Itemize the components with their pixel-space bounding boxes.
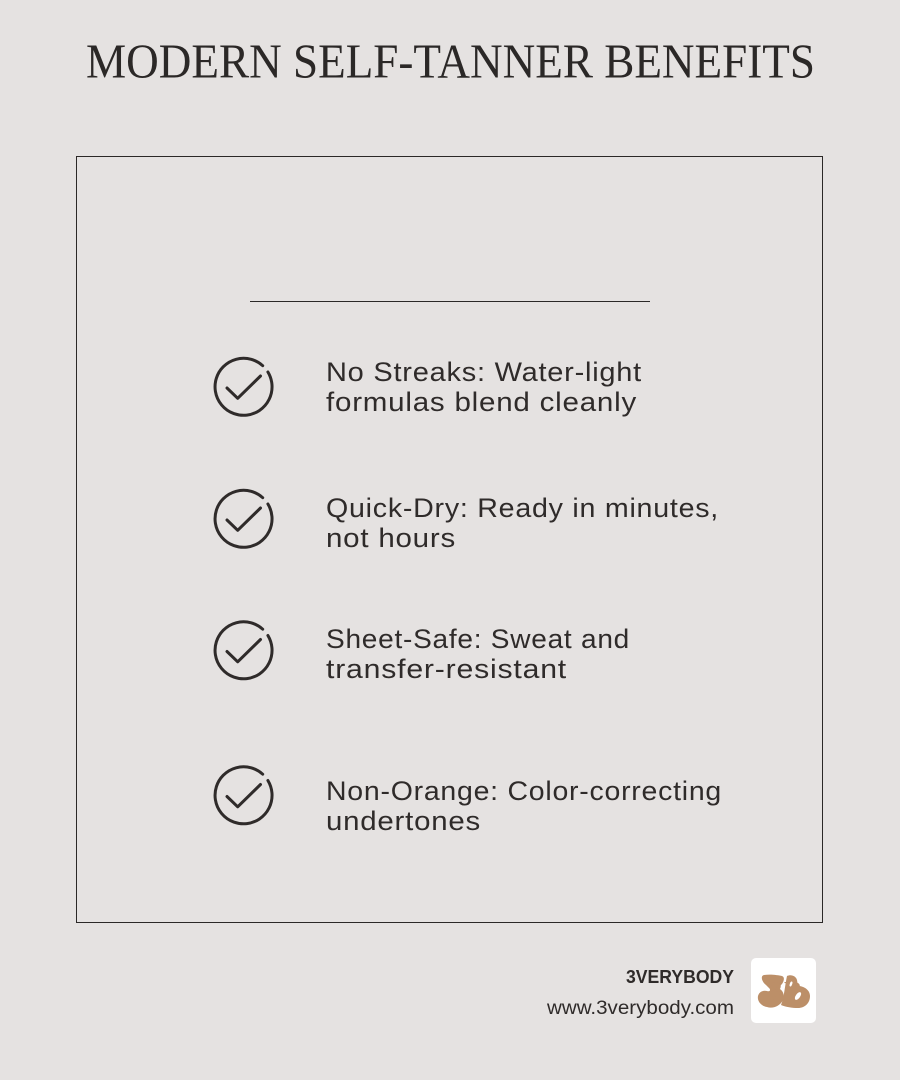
footer url: www.3verybody.com	[546, 997, 734, 1019]
text: sheet-safe: Sheet-Safe: Sweat and	[326, 624, 630, 654]
icon: check circle	[215, 358, 272, 415]
footer brand name: 3VERYBODY	[626, 967, 734, 987]
benefit: non-orange	[215, 767, 722, 836]
text: non-orange: undertones	[326, 806, 481, 836]
icon: check circle	[215, 767, 272, 824]
icon: check circle	[215, 622, 272, 679]
benefit: no streaks	[215, 357, 642, 417]
text: no streaks: No Streaks: Water-light	[326, 357, 642, 387]
title: MODERN SELF-TANNER BENEFITS	[86, 34, 815, 88]
panel: benefits	[76, 156, 822, 922]
text: non-orange: Non-Orange: Color-correcting	[326, 776, 722, 806]
text: quick-dry: not hours	[326, 523, 456, 553]
benefit: sheet-safe	[215, 622, 630, 684]
icon: check circle	[215, 490, 272, 547]
benefit: quick-dry	[215, 490, 719, 553]
logo	[751, 958, 816, 1023]
text: sheet-safe: transfer-resistant	[326, 654, 567, 684]
text: quick-dry: Quick-Dry: Ready in minutes,	[326, 493, 719, 523]
logo: 3B	[766, 977, 801, 1008]
text: no streaks: formulas blend cleanly	[326, 387, 637, 417]
